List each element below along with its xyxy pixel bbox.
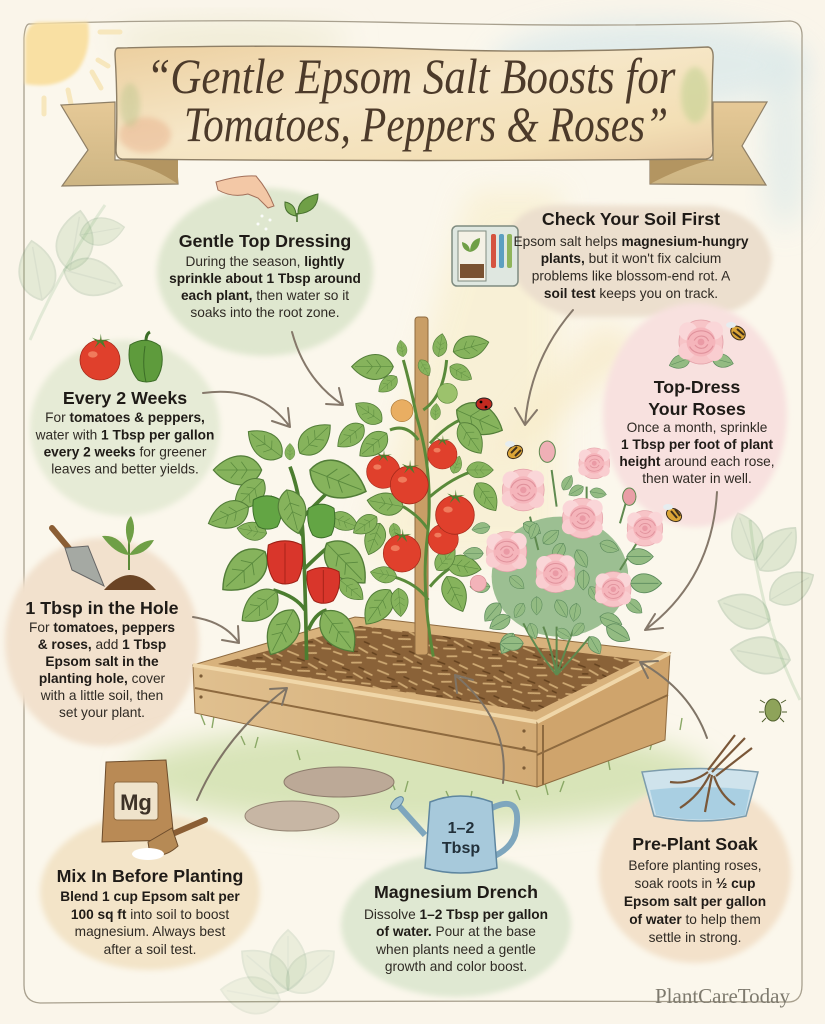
arrow: top dressing to plants bbox=[292, 332, 343, 405]
icon: Mg bag bbox=[102, 760, 174, 842]
front wooden side bbox=[193, 665, 537, 787]
heading: Your Roses bbox=[648, 399, 746, 419]
grass tufts bbox=[201, 715, 682, 802]
soil and mulch bbox=[218, 626, 640, 712]
body text: 100 sq ft into soil to boost bbox=[71, 907, 229, 922]
body text: 1 Tbsp per foot of plant bbox=[621, 437, 773, 452]
panel: gentle top dressing bbox=[157, 176, 373, 356]
body text: Epsom salt per gallon bbox=[624, 894, 766, 909]
icon: rose bbox=[667, 320, 735, 372]
green peppers bbox=[253, 496, 281, 529]
icon: bee near roses bbox=[505, 441, 525, 461]
heading: 1 Tbsp in the Hole bbox=[25, 598, 179, 618]
heading: Mix In Before Planting bbox=[57, 866, 243, 886]
panel: every 2 weeks bbox=[30, 332, 220, 516]
arrow: every two weeks to pepper bbox=[203, 392, 290, 427]
back rim bbox=[193, 617, 670, 722]
body text: & roses, add 1 Tbsp bbox=[38, 637, 166, 652]
left ribbon tail bbox=[61, 102, 178, 186]
body text: settle in strong. bbox=[649, 930, 741, 945]
icon: hand sprinkling bbox=[216, 176, 274, 230]
background foliage right bbox=[713, 508, 821, 700]
icon: sprout bbox=[285, 194, 318, 222]
icon: watering can: Tbsp bbox=[442, 840, 480, 857]
body text: soaks into the root zone. bbox=[190, 305, 340, 320]
body text: when plants need a gentle bbox=[375, 942, 536, 957]
body text: with a little soil, then bbox=[40, 688, 163, 703]
body text: each plant, then water so it bbox=[181, 288, 349, 303]
panel: top-dress your roses bbox=[603, 303, 787, 527]
tomatoes bbox=[367, 450, 400, 488]
body text: planting hole, cover bbox=[39, 671, 165, 686]
heading: Every 2 Weeks bbox=[63, 388, 187, 408]
icon: soil test kit bbox=[452, 226, 518, 286]
body text: problems like blossom-end rot. A bbox=[532, 268, 731, 284]
body text: of water. Pour at the base bbox=[376, 924, 536, 939]
icon: green beetle bbox=[759, 699, 787, 722]
rose bush bbox=[463, 441, 663, 675]
icon: Mg bag: Mg bbox=[120, 790, 152, 815]
body text: after a soil test. bbox=[104, 942, 196, 957]
body text: soak roots in ½ cup bbox=[635, 876, 755, 891]
body text: Once a month, sprinkle bbox=[627, 420, 767, 435]
title text: “Gentle Epsom Salt Boosts for bbox=[146, 48, 676, 104]
arrow: hole to bed bbox=[193, 617, 239, 643]
icon: ladybug bbox=[476, 398, 492, 410]
body text: Before planting roses, bbox=[628, 858, 762, 873]
icon: roots in bowl bbox=[642, 735, 758, 821]
pepper plant bbox=[203, 416, 377, 661]
arrow: soak to bed bbox=[640, 661, 707, 738]
arrow: drench to soil bbox=[455, 675, 504, 783]
icon: green pepper bbox=[129, 332, 162, 382]
panel: magnesium drench bbox=[341, 795, 571, 997]
heading: Top-Dress bbox=[654, 377, 740, 397]
body text: then water in well. bbox=[642, 471, 752, 486]
brand logo text: PlantCareToday bbox=[655, 984, 790, 1008]
rose buds bbox=[539, 441, 555, 462]
body text: height around each rose, bbox=[619, 454, 775, 469]
title banner bbox=[61, 46, 767, 186]
body text: leaves and better yields. bbox=[51, 462, 199, 476]
background foliage bottom bbox=[218, 930, 346, 1018]
tomato plant bbox=[332, 331, 509, 657]
body text: Blend 1 cup Epsom salt per bbox=[60, 889, 240, 904]
icon: trowel bbox=[52, 528, 104, 586]
icon: watering can: 1–2 bbox=[448, 820, 474, 837]
sun bbox=[25, 22, 120, 114]
body text: For tomatoes, peppers bbox=[29, 620, 175, 635]
panel: 1 tbsp in the hole bbox=[5, 516, 199, 746]
panel: pre-plant soak bbox=[599, 735, 791, 963]
body text: set your plant. bbox=[59, 705, 145, 720]
grass ground bbox=[130, 723, 710, 827]
panel: check your soil bbox=[452, 205, 772, 317]
icon: watering can bbox=[389, 795, 517, 873]
icon: sprout in soil bbox=[102, 516, 156, 590]
panel: mix in before planting bbox=[40, 760, 260, 970]
body text: Dissolve 1–2 Tbsp per gallon bbox=[364, 907, 548, 922]
icon: tomato bbox=[80, 334, 120, 380]
body text: Epsom salt in the bbox=[45, 654, 159, 669]
right ribbon tail bbox=[650, 102, 767, 185]
body text: water with 1 Tbsp per gallon bbox=[36, 428, 214, 442]
banner body bbox=[115, 46, 713, 160]
body text: Epsom salt helps magnesium-hungry bbox=[513, 234, 749, 249]
heading: Pre-Plant Soak bbox=[632, 834, 758, 854]
body text: growth and color boost. bbox=[385, 959, 527, 974]
heading: Gentle Top Dressing bbox=[179, 231, 351, 251]
icon: second bee bbox=[663, 504, 684, 524]
body text: During the season, lightly bbox=[185, 254, 345, 269]
body text: every 2 weeks for greener bbox=[44, 444, 206, 460]
tomato stake bbox=[415, 317, 428, 655]
rose blooms bbox=[502, 469, 544, 511]
icon: bee bbox=[726, 322, 748, 343]
body text: of water to help them bbox=[629, 912, 761, 927]
raised garden bed bbox=[193, 617, 670, 787]
stepping stones bbox=[245, 767, 394, 831]
unripe tomatoes bbox=[391, 400, 413, 422]
background foliage left bbox=[14, 205, 127, 340]
body text: For tomatoes & peppers, bbox=[45, 410, 205, 425]
red peppers bbox=[267, 541, 303, 584]
body text: plants, but it won't fix calcium bbox=[541, 251, 721, 266]
arrow: soil check to bed bbox=[515, 310, 573, 425]
arrow: mix in to bed bbox=[197, 688, 287, 800]
body text: sprinkle about 1 Tbsp around bbox=[169, 271, 361, 286]
heading: Magnesium Drench bbox=[374, 882, 538, 902]
heading: Check Your Soil First bbox=[542, 209, 720, 229]
right wooden side bbox=[537, 653, 670, 787]
title banner: Tomatoes, Peppers & Roses” bbox=[184, 96, 668, 152]
body text: soil test keeps you on track. bbox=[544, 286, 718, 301]
icon: salt scoop bbox=[132, 820, 205, 860]
body text: magnesium. Always best bbox=[75, 924, 226, 939]
arrow: roses callout to bush bbox=[645, 492, 717, 630]
